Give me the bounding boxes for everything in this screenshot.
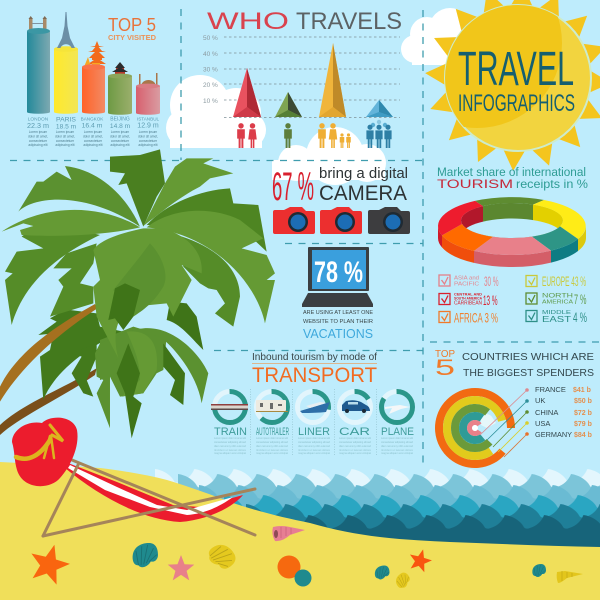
city descriptions: Lorem ipsum [84,130,103,134]
mode descriptions: diam nonummy nibh euismod [214,444,247,448]
city descriptions: consectetuer [84,139,103,143]
trunks [0,368,97,435]
icon: plane [385,405,410,414]
country labels: GERMANY [535,430,572,439]
cloud: centre [272,127,386,185]
mode descriptions: magna aliquam erat volutpat [256,451,288,455]
legend labels left: SOUTH AMERICA [454,296,482,300]
mode descriptions: Lorem ipsum dolor sit amet elit [256,436,288,440]
icon: red camera 2 [320,207,362,234]
icon: orange starfish small [406,546,434,573]
donut: autotrailer [256,392,288,422]
icon: yellow spiral shell [557,571,583,583]
city descriptions: adipiscing elit [28,143,48,147]
icon: teal shell [133,543,158,567]
cylinder: Paris [54,46,78,114]
city labels: 18.5 m [56,124,77,130]
chart axis labels: 50 % [203,35,218,42]
palm fronds front [72,228,208,438]
city descriptions: adipiscing elit [110,143,130,147]
panel: market share [437,165,588,326]
country labels: CHINA [535,408,558,417]
heading: countries: THE BIGGEST SPENDERS [463,367,594,379]
city labels: PARIS [56,116,76,124]
icon: yellow small shell [393,571,413,590]
heading: transport: TRANSPORT [252,363,377,387]
heading: who travels: TRAVELS [296,8,402,35]
chart axis labels: 30 % [203,66,218,74]
donut: plane [382,392,412,422]
donut: liner [298,392,328,422]
city descriptions: adipiscing elit [55,143,75,147]
city labels: ISTANBUL [137,116,160,122]
city labels: BEIJING [110,116,130,122]
cloud: right [401,8,471,65]
column separators [250,389,376,455]
city descriptions: adipiscing elit [83,143,103,147]
legend labels left: CARRIBEAN [454,300,482,306]
city labels: BANGKOK [81,116,104,122]
mode descriptions: magna aliquam erat volutpat [298,451,330,455]
hat ribbon [16,425,63,459]
chart axis labels: 20 % [203,82,218,89]
icon: solo traveller [284,123,292,148]
icon: eiffel tower [57,12,75,48]
mode descriptions: tincidunt ut laoreet dolore [214,448,247,452]
icon: liner [300,402,330,413]
legend labels right: EAST [542,315,571,324]
icon: group [366,120,392,148]
label: vacations: VACATIONS [303,326,373,341]
panel: camera stat: 67 % [272,165,314,209]
city descriptions: dolor sit amet, [28,134,48,138]
heading: inbound tourism: Inbound tourism by mode of [252,351,377,363]
mode descriptions: diam nonummy nibh euismod [339,444,372,448]
mode labels: TRAIN [214,426,247,438]
donut: car [340,392,370,422]
radial bar chart [424,377,526,479]
legend labels left: ASIA and [454,276,479,282]
country labels: USA [535,419,550,428]
icon: pink starfish [168,555,194,580]
mode descriptions: consectetuer adipiscing elit sed [214,440,247,444]
upper trunk [0,304,97,402]
heading: tourism receipts: TOURISM [437,177,513,191]
3D ring chart [438,197,586,267]
city descriptions: Lorem ipsum [111,130,130,134]
icon: car [342,400,370,413]
city descriptions: consectetuer [139,139,158,143]
city labels [27,116,160,130]
icon: family [318,123,351,148]
mode labels: LINER [298,426,330,438]
panel: transport [211,351,414,455]
pyramid: families [319,43,346,117]
leader dots [525,388,529,436]
text: website usage: WEBSITE TO PLAN THEIR [303,319,373,325]
icon: istanbul mosque [139,73,158,86]
sun rays [424,0,600,172]
icon: laptop [302,247,373,307]
legend labels left [454,273,498,326]
mode descriptions: diam nonummy nibh euismod [256,444,289,448]
legend labels right: AMERICA [542,300,573,306]
city descriptions: dolor sit amet, [55,134,75,138]
icon: pink spiral shell [272,526,305,541]
sun title badge [425,0,600,171]
label: camera: CAMERA [319,182,407,205]
heading: tourism receipts: receipts in % [516,177,588,191]
chart axis labels: 40 % [203,51,218,58]
icon: tower bridge [28,16,47,34]
city descriptions: consectetuer [29,139,48,143]
country values: $50 b [574,398,592,405]
icon: teal small shell [375,566,390,579]
ring outer walls [438,226,586,267]
legend checkboxes [439,275,537,322]
legend labels left: AFRICA 3 % [454,310,498,326]
city descriptions: dolor sit amet, [138,134,158,138]
city descriptions: adipiscing elit [138,143,158,147]
cylinder: Beijing [108,74,132,115]
icon: pagoda [84,41,106,67]
legend labels right: NORTH [542,292,573,300]
sun hat [12,418,78,486]
icon: red camera 1 [273,207,315,234]
chair canvas [65,463,243,522]
mode descriptions: tincidunt ut laoreet dolore [256,448,289,452]
legend labels right: 4 % [573,309,587,325]
city descriptions: consectetuer [56,139,75,143]
icon: couple [237,123,257,148]
label: bring a digital: bring a digital [319,166,408,182]
legend labels left: CENTRAL AND [454,292,482,296]
city descriptions: Lorem ipsum [56,130,75,134]
country labels: FRANCE [535,385,566,394]
legend labels right [542,273,587,325]
panel: website stat [302,247,373,341]
mode labels [214,426,414,438]
palm tree [0,149,275,438]
text: website usage: ARE USING AT LEAST ONE [303,310,373,316]
country values: $79 b [574,421,592,428]
pyramid: solo [275,92,302,117]
cylinder: London [27,28,50,114]
pyramid: couples [233,68,261,117]
beach sand [0,462,600,600]
city descriptions: Lorem ipsum [139,130,158,134]
heading: market share: Market share of international [437,165,586,179]
donut: train [214,392,246,422]
icon: yellow shell [205,540,239,574]
mode descriptions: Lorem ipsum dolor sit amet elit [381,436,413,440]
mode descriptions: consectetuer adipiscing elit sed [381,440,414,444]
heading: top: TOP [435,349,455,360]
cylinder: Bangkok [82,64,105,114]
icon: train [211,404,248,410]
stat: 78 percent: 78 % [314,256,363,289]
text: website usage [303,310,373,325]
ring top face [438,197,586,255]
mode descriptions: magna aliquam erat volutpat [214,451,246,455]
country values: $72 b [574,410,592,417]
legend labels right: 7 % [574,291,586,307]
leader lines [480,390,527,457]
city labels: 12.9 m [137,122,159,130]
legend labels right: MIDDLE [542,310,571,316]
panel: who travels [203,8,402,148]
city labels: 16.4 m [82,122,103,130]
city descriptions: dolor sit amet, [83,134,103,138]
mode labels: CAR [339,426,370,438]
icon: black camera [368,207,410,234]
heading: countries [462,351,594,379]
panel: market share: 13 % [483,292,498,308]
mode descriptions: tincidunt ut laoreet dolore [381,448,414,452]
heading: countries: COUNTRIES WHICH ARE [462,351,594,363]
heading: top 5: TOP 5 [108,15,156,35]
country labels: UK [535,396,545,405]
mode descriptions: consectetuer adipiscing elit sed [298,440,331,444]
mode descriptions: Lorem ipsum dolor sit amet elit [214,436,246,440]
deck chair [43,460,255,536]
icon: orange shell [278,556,300,578]
city descriptions: consectetuer [111,139,130,143]
mode descriptions: consectetuer adipiscing elit sed [256,440,289,444]
panel: market share: 30 % [484,273,498,289]
section dividers [10,9,600,465]
waves [155,469,600,574]
icon: autotrailer [256,400,288,412]
mode labels: PLANE [381,426,414,438]
chart axis labels [203,35,218,105]
icon: teal round shell [294,570,312,586]
mode descriptions: magna aliquam erat volutpat [381,451,413,455]
city labels: LONDON [28,116,49,122]
mode labels: AUTOTRAILER [256,426,289,438]
panel: biggest spenders [424,349,594,479]
chart grid [224,37,400,118]
sun disc [444,4,592,152]
mode descriptions: consectetuer adipiscing elit sed [339,440,372,444]
cylinder: Istanbul [136,84,160,115]
icon: orange starfish large [25,540,74,587]
panel: top 5 cities [27,12,160,147]
country values: $84 b [574,432,592,439]
city descriptions: Lorem ipsum [29,130,48,134]
ring inner walls [461,203,563,238]
heading: 5: 5 [435,355,455,380]
heading: who travels: WHO [207,8,289,35]
icon: teal shell right [532,564,546,577]
city labels: 14.8 m [110,123,131,130]
mode descriptions: Lorem ipsum dolor sit amet elit [339,436,371,440]
icon: temple of heaven [112,62,128,76]
cloud: left [166,75,266,148]
mode descriptions: Lorem ipsum dolor sit amet elit [298,436,330,440]
hat body [12,418,78,486]
beach shells and stars [25,526,583,590]
chair frame [43,460,255,536]
palm fronds back [2,149,275,400]
mode descriptions: magna aliquam erat volutpat [339,451,371,455]
mode descriptions: tincidunt ut laoreet dolore [298,448,331,452]
city descriptions [28,130,158,147]
country labels [535,385,572,439]
country values: $41 b [573,387,591,394]
mode descriptions: tincidunt ut laoreet dolore [339,448,372,452]
legend labels left: PACIFIC [454,282,479,288]
country values [573,387,592,439]
city labels: 22.3 m [27,121,49,130]
mode descriptions: diam nonummy nibh euismod [381,444,414,448]
chair stripe [68,465,233,515]
mode descriptions: diam nonummy nibh euismod [298,444,331,448]
pyramid: groups [366,100,393,117]
panel: camera stat [272,165,410,234]
mode descriptions [214,436,414,455]
subheading: city visited: CITY VISITED [108,35,156,42]
city descriptions: dolor sit amet, [110,134,130,138]
chart axis labels: 10 % [203,98,218,105]
